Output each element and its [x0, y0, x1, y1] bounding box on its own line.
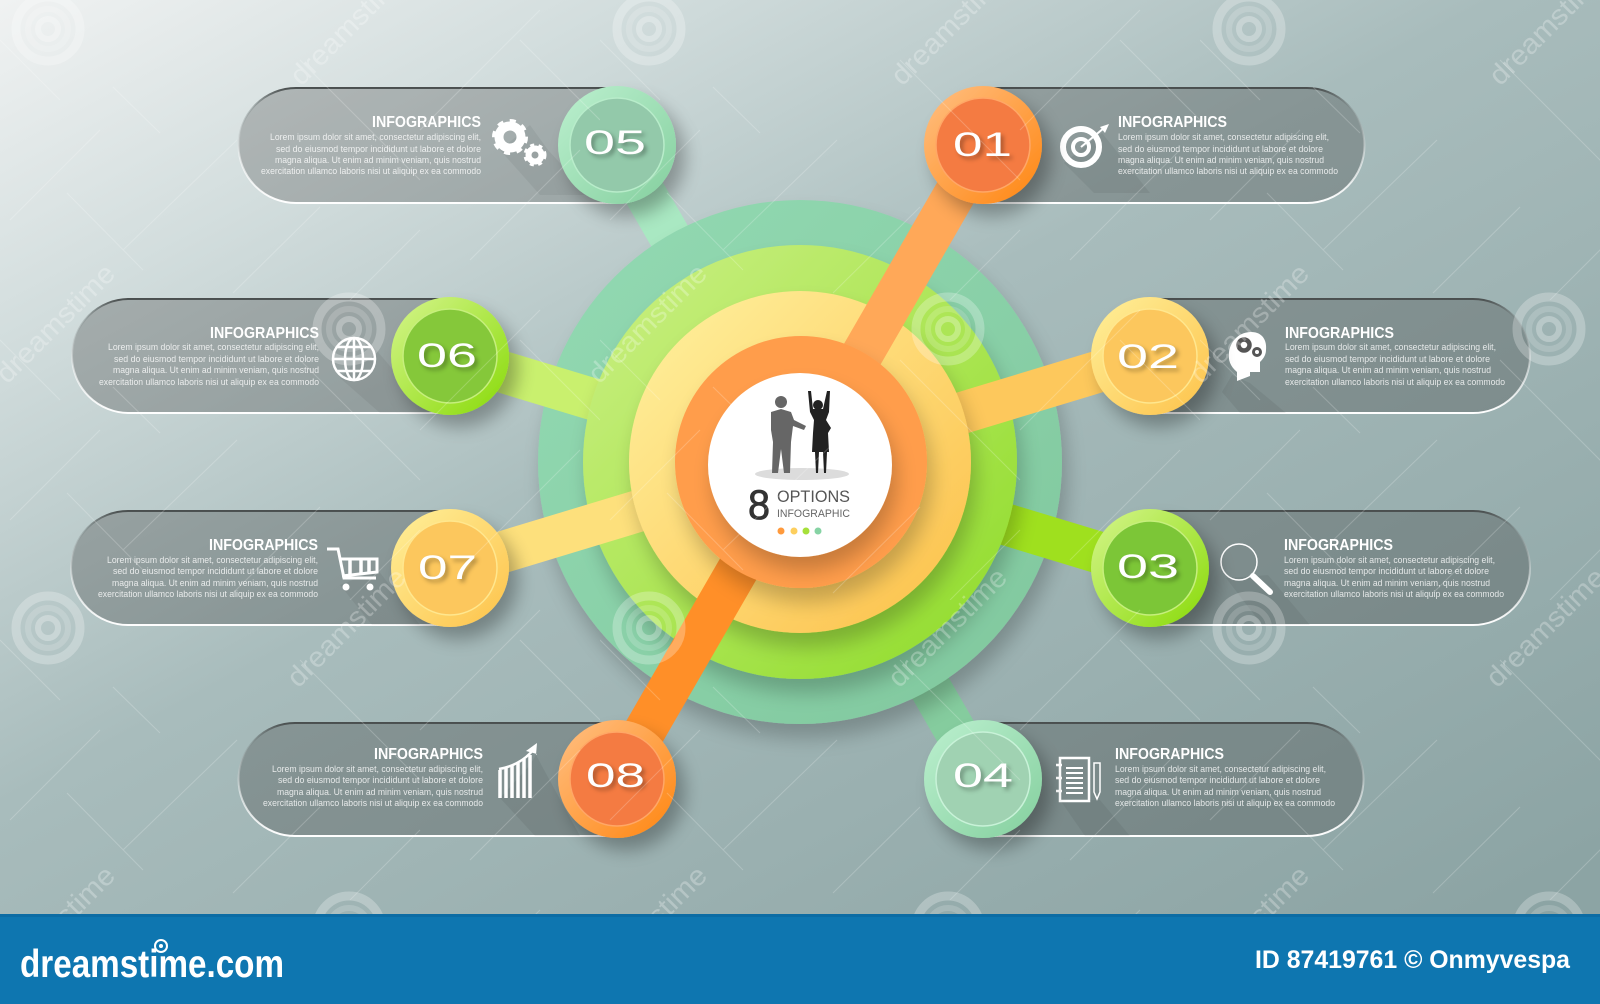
central ring diagram	[450, 145, 1150, 779]
watermark overlay: dreamstime	[582, 860, 713, 991]
body text: magna aliqua. Ut enim ad minim veniam, quis nostrud	[1115, 787, 1321, 798]
icon: target	[1063, 124, 1150, 193]
number badge 06: 06	[417, 337, 477, 375]
heading: INFOGRAPHICS	[210, 325, 319, 342]
outer teal ring	[538, 200, 1062, 724]
watermark overlay: dreamstime	[582, 258, 713, 389]
pill	[983, 723, 1364, 836]
watermark overlay: dreamstime	[882, 562, 1013, 693]
number badge 06	[391, 297, 509, 415]
body text: exercitation ullamco laboris nisi ut aliquip ex ea commodo	[1115, 798, 1335, 809]
footer credit: ID 87419761 © Onmyvespa	[1255, 946, 1571, 974]
body text: magna aliqua. Ut enim ad minim veniam, quis nostrud	[1285, 365, 1491, 376]
number badge 03	[1091, 509, 1209, 627]
body text: Lorem ipsum dolor sit amet, consectetur adipiscing elit,	[1285, 342, 1496, 353]
panel 03	[1091, 509, 1530, 627]
floor shadow	[755, 468, 849, 480]
OPTIONS label: OPTIONS	[777, 487, 850, 506]
color dots	[778, 528, 822, 534]
body text: sed do eiusmod tempor incididunt ut labore et dolore	[278, 775, 483, 786]
woman silhouette	[808, 391, 831, 473]
number badge 01	[924, 86, 1042, 204]
spokes: yellow 07 and 02	[450, 356, 1150, 568]
body text: exercitation ullamco laboris nisi ut aliquip ex ea commodo	[1285, 377, 1505, 388]
body text	[263, 764, 483, 809]
heading: INFOGRAPHICS	[372, 114, 481, 131]
body text: magna aliqua. Ut enim ad minim veniam, quis nostrud	[275, 155, 481, 166]
icon: growth chart	[499, 743, 580, 836]
body text: Lorem ipsum dolor sit amet, consectetur adipiscing elit,	[270, 132, 481, 143]
body text	[1285, 342, 1505, 388]
pill	[71, 511, 450, 625]
footer logo: dreamstime.com	[20, 943, 284, 986]
body text: magna aliqua. Ut enim ad minim veniam, quis nostrud	[113, 365, 319, 376]
body text: Lorem ipsum dolor sit amet, consectetur adipiscing elit,	[1118, 132, 1329, 143]
body text	[261, 132, 481, 177]
body text: exercitation ullamco laboris nisi ut aliquip ex ea commodo	[99, 377, 319, 388]
body text: sed do eiusmod tempor incididunt ut labore et dolore	[1284, 566, 1489, 577]
center badge	[708, 373, 892, 557]
pill	[1150, 511, 1530, 625]
body text	[98, 555, 318, 600]
body text: magna aliqua. Ut enim ad minim veniam, quis nostrud	[1118, 155, 1324, 166]
watermark overlay: dreamstime	[281, 562, 412, 693]
pill	[239, 88, 617, 203]
body text	[1118, 132, 1338, 177]
footer bar	[0, 914, 1600, 1004]
body text: exercitation ullamco laboris nisi ut aliquip ex ea commodo	[263, 798, 483, 809]
icon: shopping cart	[327, 549, 420, 625]
body text: exercitation ullamco laboris nisi ut aliquip ex ea commodo	[1284, 589, 1504, 600]
spokes: green 06 and 03	[450, 356, 1150, 568]
number badge 04: 04	[953, 757, 1013, 795]
pill	[72, 299, 450, 413]
number badge 08	[558, 720, 676, 838]
body text: sed do eiusmod tempor incididunt ut labore et dolore	[1285, 354, 1490, 365]
panel 04	[924, 720, 1364, 838]
orange ring	[675, 336, 927, 588]
body text: sed do eiusmod tempor incididunt ut labore et dolore	[276, 144, 481, 155]
pill	[983, 88, 1364, 203]
body text	[1115, 764, 1335, 809]
panel 07	[71, 509, 509, 627]
heading: INFOGRAPHICS	[1284, 537, 1393, 554]
number badge 03: 03	[1117, 548, 1179, 586]
body text: Lorem ipsum dolor sit amet, consectetur adipiscing elit,	[108, 342, 319, 353]
number badge 04	[924, 720, 1042, 838]
pill	[1150, 299, 1530, 413]
number badge 05: 05	[584, 124, 646, 162]
spokes: teal 05 and 04	[617, 145, 983, 779]
panel 08	[239, 720, 676, 838]
panel 01	[924, 86, 1364, 204]
body text	[99, 342, 319, 388]
icon: head with gears	[1222, 332, 1286, 413]
INFOGRAPHIC label: INFOGRAPHIC	[777, 508, 850, 520]
panel 06	[72, 297, 509, 415]
heading: INFOGRAPHICS	[374, 746, 483, 763]
number badge 07: 07	[418, 549, 477, 587]
body text: exercitation ullamco laboris nisi ut aliquip ex ea commodo	[98, 589, 318, 600]
icon: notebook and pencil	[1056, 758, 1130, 836]
big numeral 8: 8	[748, 481, 770, 528]
icon: globe	[333, 338, 430, 413]
panel 02	[1091, 297, 1530, 415]
green ring	[583, 245, 1017, 679]
panel 05	[239, 86, 676, 204]
body text	[1284, 555, 1504, 600]
body text: Lorem ipsum dolor sit amet, consectetur adipiscing elit,	[1284, 555, 1495, 566]
number badge 07	[391, 509, 509, 627]
body text: Lorem ipsum dolor sit amet, consectetur adipiscing elit,	[1115, 764, 1326, 775]
yellow ring	[629, 291, 971, 633]
number badge 05	[558, 86, 676, 204]
heading: INFOGRAPHICS	[1115, 746, 1224, 763]
number badge 02	[1091, 297, 1209, 415]
man silhouette	[771, 396, 806, 473]
spokes: orange 01 and 08	[617, 145, 983, 779]
body text: sed do eiusmod tempor incididunt ut labore et dolore	[1115, 775, 1320, 786]
body text: exercitation ullamco laboris nisi ut aliquip ex ea commodo	[1118, 166, 1338, 177]
body text: sed do eiusmod tempor incididunt ut labore et dolore	[113, 566, 318, 577]
heading: INFOGRAPHICS	[1118, 114, 1227, 131]
number badge 02: 02	[1117, 338, 1179, 376]
body text: sed do eiusmod tempor incididunt ut labore et dolore	[114, 354, 319, 365]
white disc	[708, 373, 892, 557]
body text: magna aliqua. Ut enim ad minim veniam, quis nostrud	[1284, 578, 1490, 589]
icon: magnifier	[1221, 544, 1310, 625]
body text: sed do eiusmod tempor incididunt ut labore et dolore	[1118, 144, 1323, 155]
body text: magna aliqua. Ut enim ad minim veniam, quis nostrud	[112, 578, 318, 589]
body text: Lorem ipsum dolor sit amet, consectetur adipiscing elit,	[272, 764, 483, 775]
watermark overlay: dreamstime	[1184, 258, 1315, 389]
number badge 08: 08	[586, 757, 645, 795]
icon: gears	[494, 121, 590, 195]
body text: magna aliqua. Ut enim ad minim veniam, quis nostrud	[277, 787, 483, 798]
body text: Lorem ipsum dolor sit amet, consectetur adipiscing elit,	[107, 555, 318, 566]
number badge 01: 01	[953, 126, 1012, 164]
body text: exercitation ullamco laboris nisi ut aliquip ex ea commodo	[261, 166, 481, 177]
heading: INFOGRAPHICS	[1285, 325, 1394, 342]
pill	[239, 723, 617, 836]
heading: INFOGRAPHICS	[209, 537, 318, 554]
watermark overlay: dreamstime	[1184, 860, 1315, 991]
